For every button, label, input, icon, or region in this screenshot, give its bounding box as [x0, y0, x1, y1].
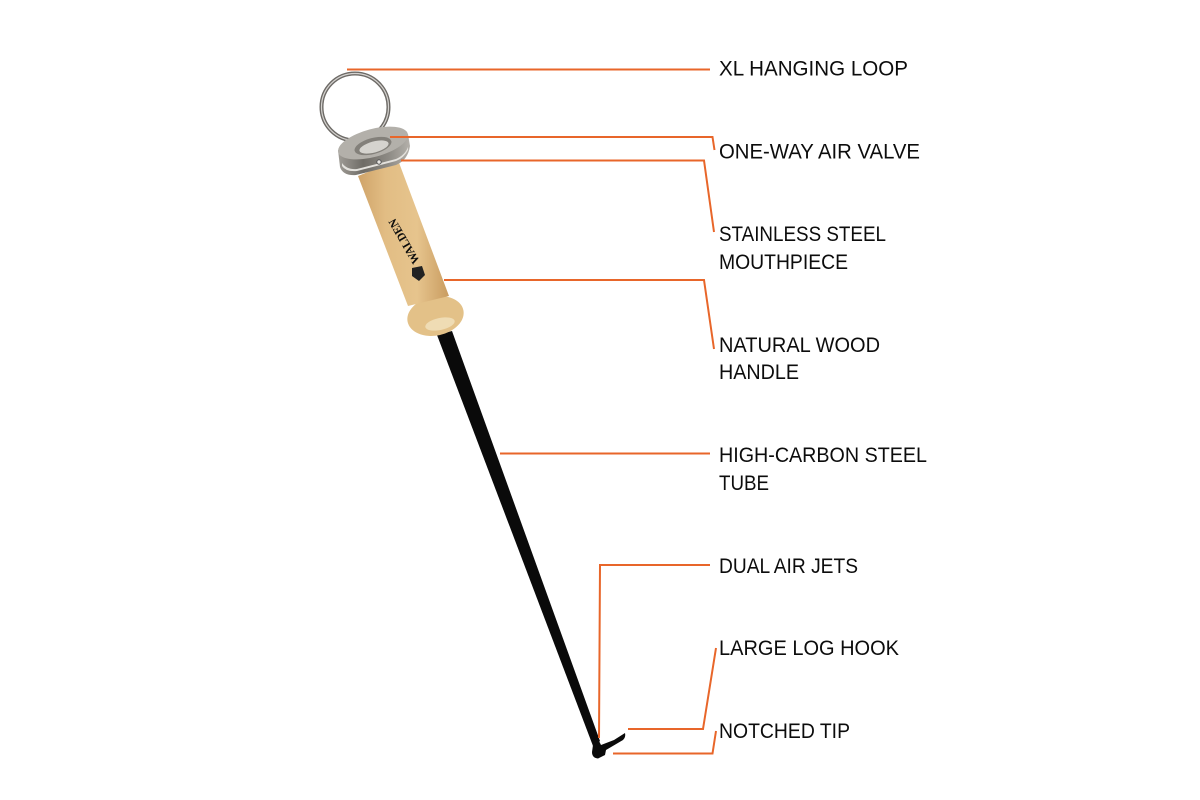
callout: notched tip	[613, 720, 850, 754]
handle logo: WALDEN	[385, 216, 423, 266]
callout: natural wood handle: HANDLE	[719, 361, 799, 384]
callout: one-way air valve	[390, 137, 920, 164]
callout: stainless steel mouthpiece: MOUTHPIECE	[719, 251, 848, 274]
callout: stainless steel mouthpiece: STAINLESS STEEL	[719, 223, 886, 246]
icon: hanging loop	[322, 74, 388, 140]
callout: notched tip: NOTCHED TIP	[719, 720, 850, 743]
callout: natural wood handle: NATURAL WOOD	[719, 334, 880, 357]
callout: stainless steel mouthpiece	[401, 160, 886, 274]
callout: high-carbon steel tube	[500, 444, 927, 495]
steel tube	[437, 331, 600, 746]
callout: large log hook: LARGE LOG HOOK	[719, 637, 899, 660]
stainless steel mouthpiece	[335, 120, 411, 175]
callout: high-carbon steel tube: TUBE	[719, 472, 769, 495]
callout: dual air jets	[599, 555, 858, 738]
callout: natural wood handle	[444, 280, 880, 384]
callout: XL hanging loop: XL HANGING LOOP	[719, 58, 908, 80]
large log hook and notched tip	[592, 733, 625, 758]
callout: high-carbon steel tube: HIGH-CARBON STEEL	[719, 444, 927, 467]
wood handle	[358, 160, 467, 341]
product: tool illustration	[322, 74, 625, 758]
callout: large log hook	[628, 637, 899, 729]
handle logo	[385, 216, 425, 281]
callout: dual air jets: DUAL AIR JETS	[719, 555, 858, 578]
callout: one-way air valve: ONE-WAY AIR VALVE	[719, 140, 920, 164]
